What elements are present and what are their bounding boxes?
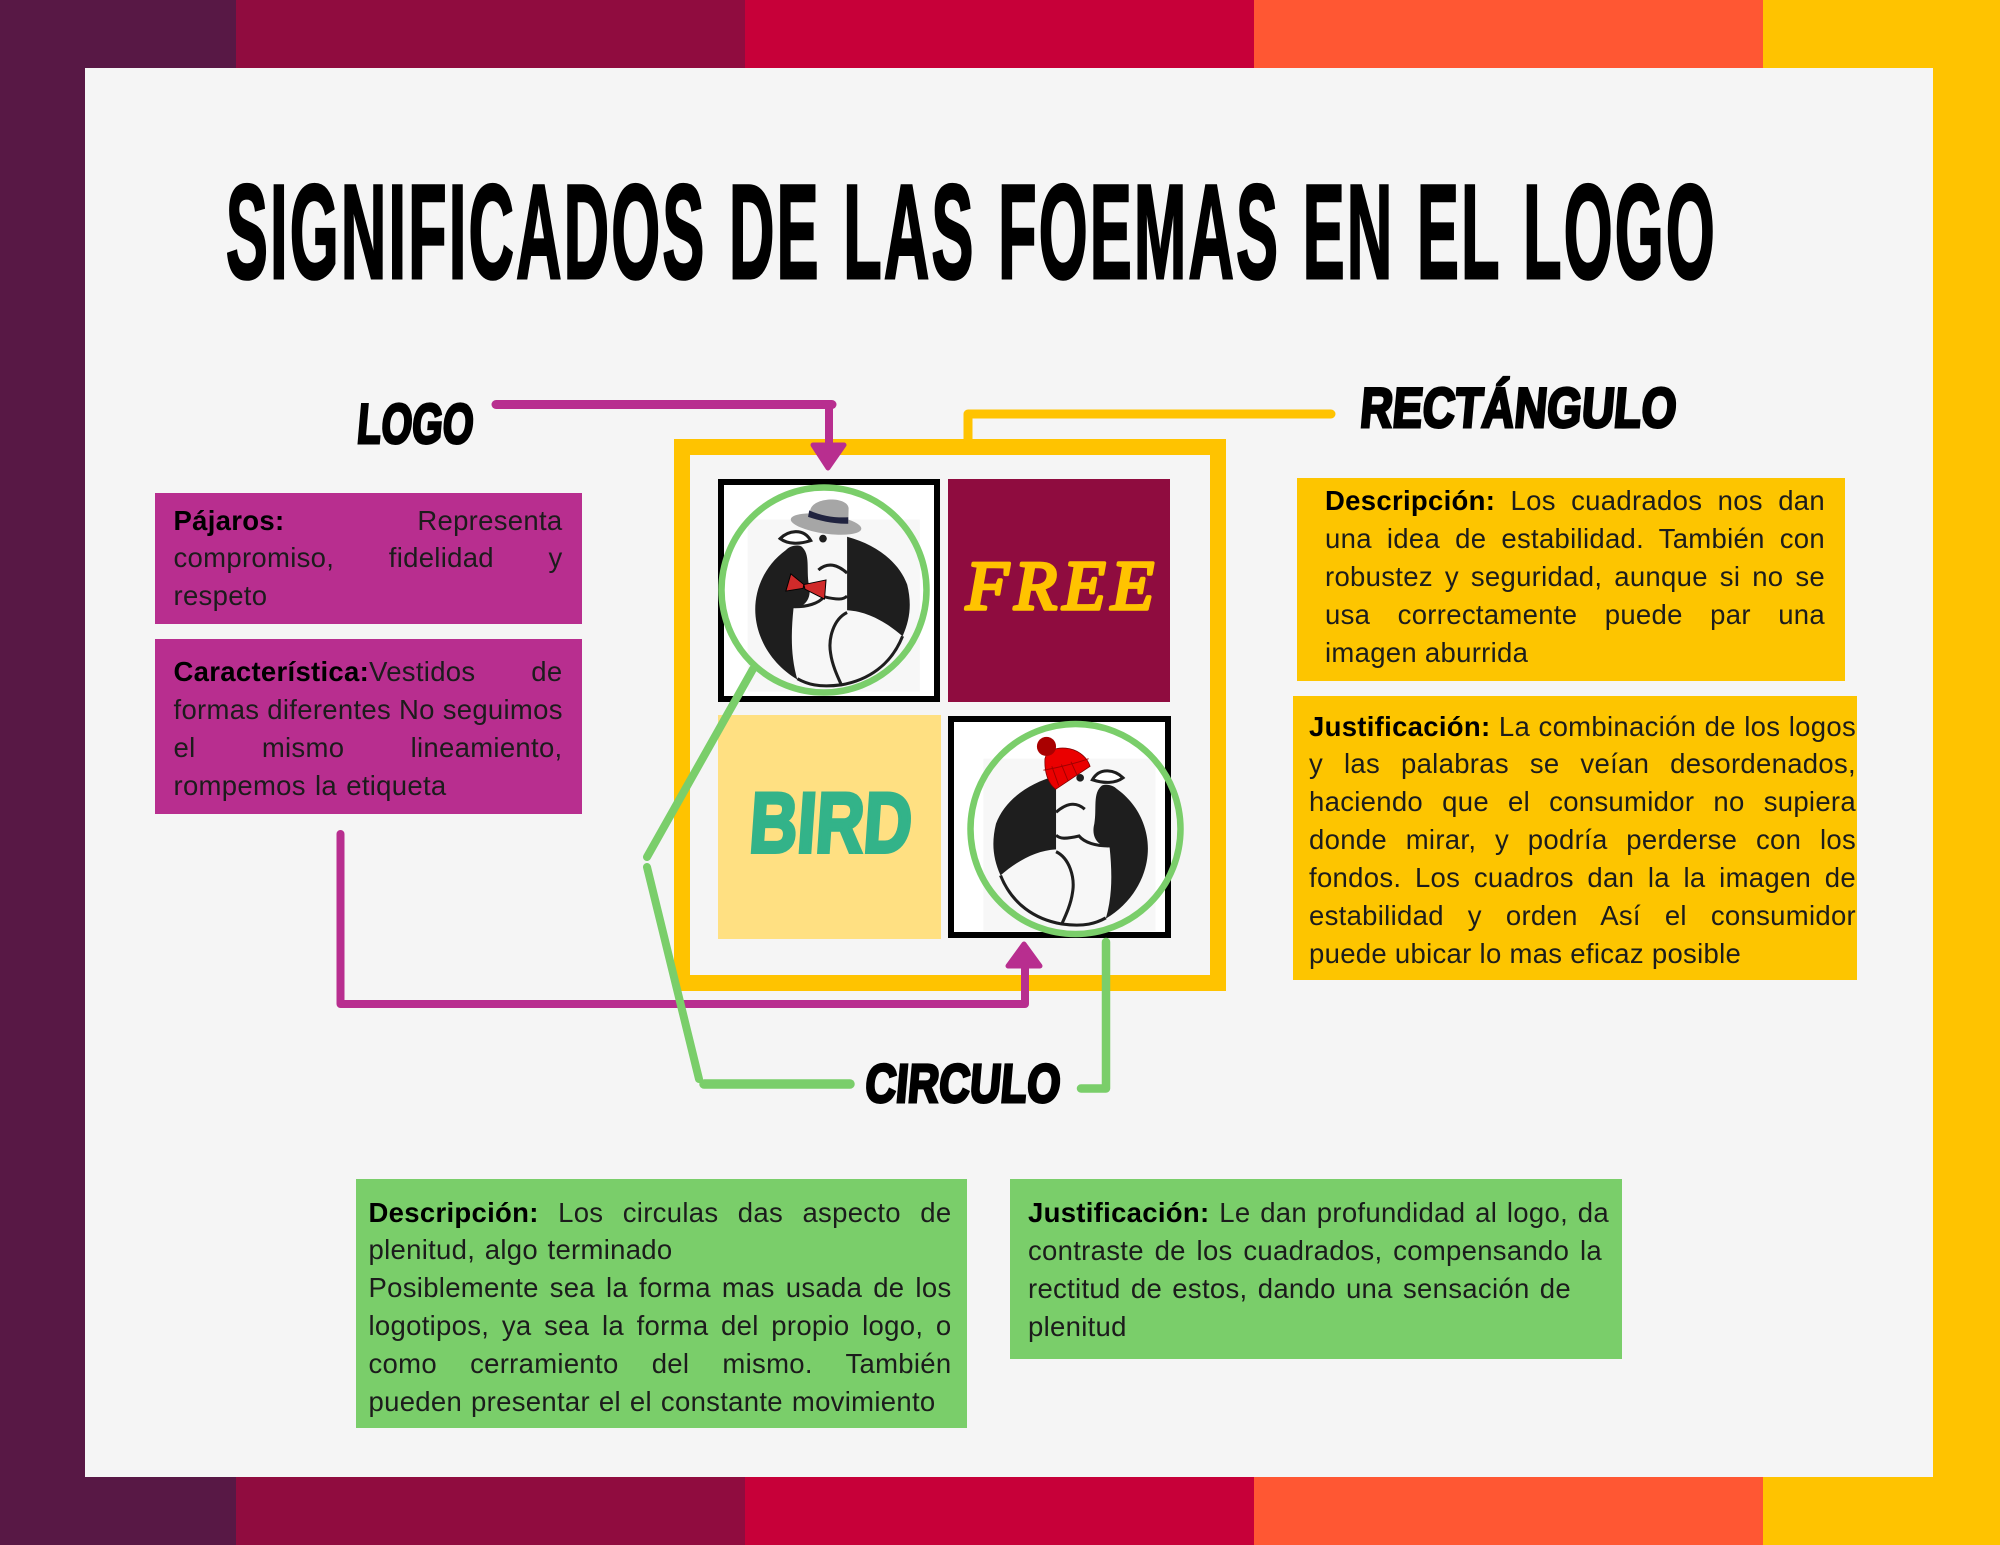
panel: rectangulo justificacion: estabilidad y orden Así el consumidor — [1309, 900, 1856, 931]
green connector: circulo to top left circle — [647, 669, 850, 1084]
panel: rectangulo justificacion: Justificación: La combinación de los logos — [1309, 711, 1856, 742]
panel: rectangulo descripcion: Descripción: Los cuadrados nos dan — [1325, 485, 1825, 516]
panel: rectangulo justificacion: y las palabras se veían desordenados, — [1309, 748, 1856, 779]
panel: pajaros: compromiso, fidelidad y — [174, 542, 562, 573]
panel: rectangulo descripcion: usa correctamente puede par una — [1325, 599, 1825, 630]
panel: circulo descripcion: plenitud, algo terminado — [368, 1234, 672, 1265]
panel: circulo descripcion — [356, 1179, 967, 1428]
panel: rectangulo justificacion: haciendo que el consumidor no supiera — [1309, 786, 1856, 817]
icon: red bow tie — [786, 574, 826, 599]
panel: pajaros — [154, 493, 582, 624]
panel: circulo justificacion: Justificación: Le dan profundidad al logo, da — [1028, 1197, 1609, 1228]
panel: rectangulo justificacion: donde mirar, y podría perderse con los — [1309, 824, 1856, 855]
magenta arrow: characteristics to bottom tile — [340, 834, 1040, 1004]
panel: circulo justificacion: rectitud de estos, dando una sensación de — [1028, 1273, 1571, 1304]
logo tile: bird with beanie — [951, 719, 1168, 935]
panel: caracteristica: formas diferentes No seguimos — [174, 694, 563, 725]
panel: circulo justificacion — [1010, 1179, 1622, 1359]
panel: caracteristica: rompemos la etiqueta — [174, 770, 446, 801]
panel: rectangulo justificacion — [1293, 696, 1857, 980]
panel: rectangulo justificacion: puede ubicar lo mas eficaz posible — [1309, 938, 1741, 969]
heading: circulo: CIRCULO — [863, 1054, 1063, 1114]
panel: circulo descripcion: Descripción: Los circulas das aspecto de — [368, 1197, 952, 1228]
heading: rectangulo: RECTÁNGULO — [1358, 376, 1679, 439]
yellow rectangle frame — [682, 447, 1218, 983]
green circle: bottom right logo — [970, 724, 1180, 934]
panel: caracteristica: Característica:Vestidos de — [174, 656, 562, 687]
panel: circulo descripcion: pueden presentar el el constante movimiento — [368, 1386, 936, 1417]
icon: gray hat — [789, 500, 863, 539]
heading: logo: LOGO — [355, 392, 476, 455]
green connector: circulo to bottom right circle — [1081, 942, 1106, 1088]
logo tile: bird wordmark: BIRD — [747, 776, 915, 871]
panel: pajaros: Pájaros: Representa — [174, 505, 562, 536]
panel: circulo justificacion: contraste de los cuadrados, compensando la — [1028, 1235, 1602, 1266]
logo tile: bird with hat — [721, 482, 937, 699]
panel: caracteristica: el mismo lineamiento, — [174, 732, 562, 763]
panel: circulo descripcion: logotipos, ya sea la forma del propio logo, o — [368, 1310, 952, 1341]
logo tile: bird wordmark — [718, 715, 941, 939]
green circle: top left logo — [722, 488, 926, 692]
panel: circulo descripcion: como cerramiento del mismo. También — [368, 1348, 952, 1379]
logo tile: free: FREE — [965, 548, 1154, 625]
logo tile: free — [948, 479, 1170, 702]
magenta arrow: logo to top tile — [496, 404, 844, 468]
panel: rectangulo descripcion — [1297, 478, 1845, 681]
panel: rectangulo descripcion: imagen aburrida — [1325, 637, 1528, 668]
icon: red beanie — [1037, 737, 1090, 789]
panel: rectangulo descripcion: una idea de estabilidad. También con — [1325, 523, 1825, 554]
panel: circulo descripcion: Posiblemente sea la forma mas usada de los — [368, 1272, 952, 1303]
panel: caracteristica — [154, 639, 582, 814]
panel: rectangulo descripcion: robustez y seguridad, aunque si no se — [1325, 561, 1825, 592]
panel: rectangulo justificacion: fondos. Los cuadros dan la la imagen de — [1309, 862, 1856, 893]
panel: pajaros: respeto — [174, 580, 267, 611]
panel: circulo justificacion: plenitud — [1028, 1311, 1127, 1342]
yellow connector to rectangulo — [968, 414, 1331, 440]
